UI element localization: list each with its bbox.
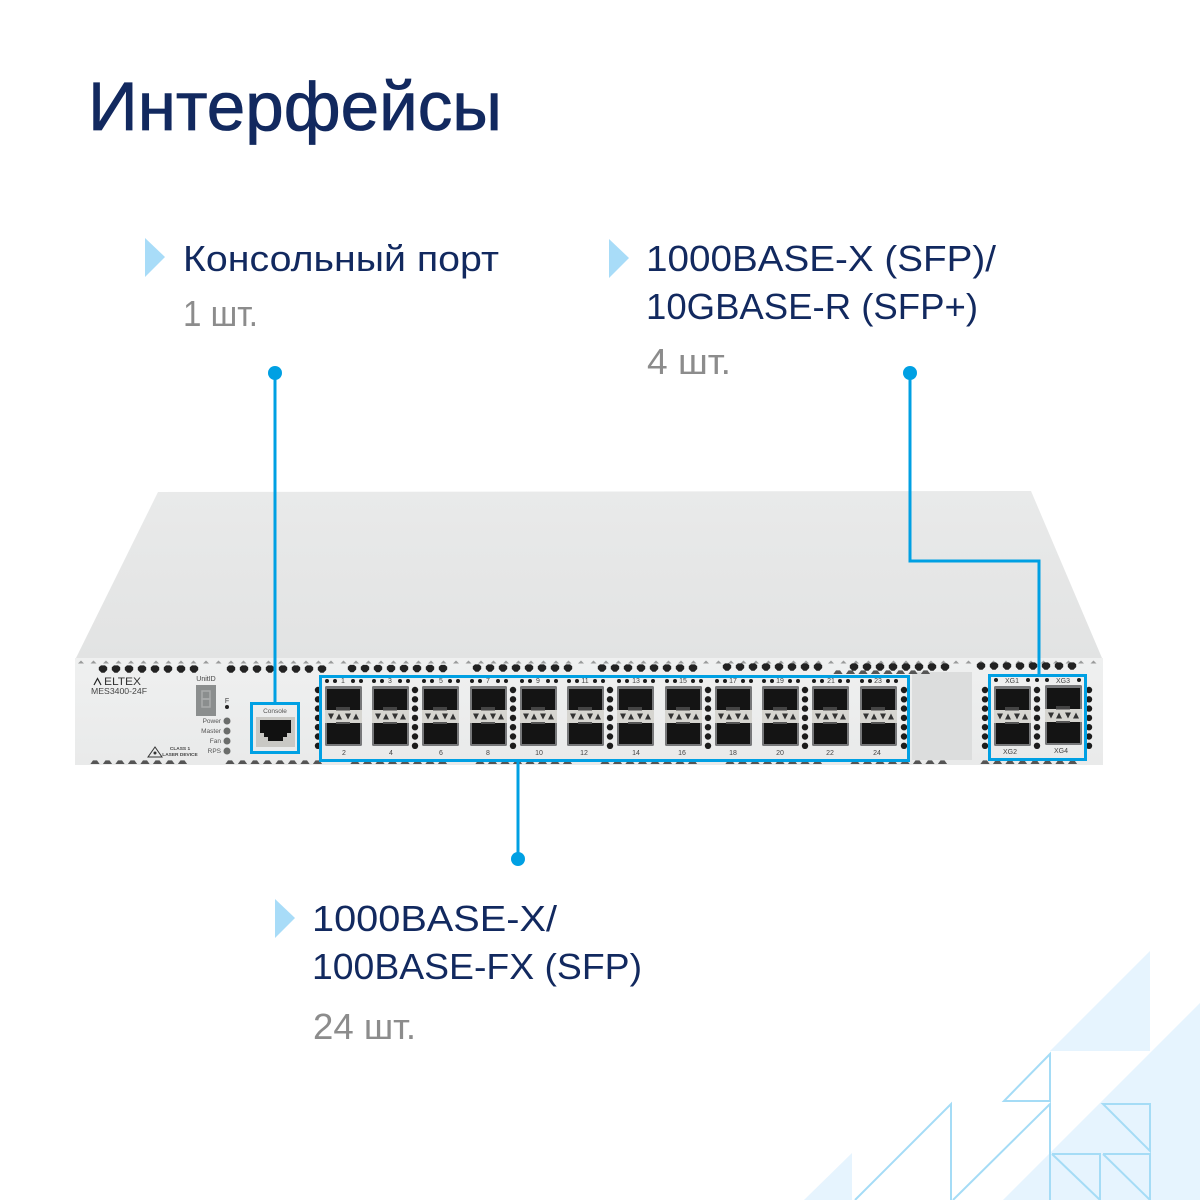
label: SFP+: 1000BASE-X (SFP)/ — [646, 238, 996, 279]
SFP ports 1-24: 6 — [439, 750, 443, 757]
label: SFP: 100BASE-FX (SFP) — [312, 946, 642, 987]
SFP ports 1-24: 19 — [776, 678, 784, 685]
laser warning: LASER DEVICE — [162, 752, 199, 758]
unit id display — [196, 676, 229, 716]
status LEDs: Master — [201, 728, 222, 735]
SFP ports 1-24: 12 — [580, 750, 588, 757]
SFP+ ports XG1-XG4: XG2 — [1003, 749, 1017, 756]
console port: Console — [263, 708, 287, 715]
SFP ports 1-24: 5 — [439, 678, 443, 685]
chassis front panel — [75, 658, 1103, 765]
SFP dot columns — [315, 687, 1092, 749]
SFP ports 1-24: 14 — [632, 750, 640, 757]
SFP ports 1-24: 15 — [679, 678, 687, 685]
SFP ports 1-24: 1 — [341, 678, 345, 685]
brand label: MES3400-24F — [91, 686, 147, 696]
SFP ports 1-24: 24 — [873, 750, 881, 757]
SFP ports 1-24: 9 — [536, 678, 540, 685]
status LEDs — [201, 718, 230, 755]
status LEDs: Power — [203, 718, 222, 725]
SFP+ ports XG1-XG4 — [994, 678, 1082, 756]
label: console port: 1 шт. — [183, 293, 258, 334]
label: SFP+ — [609, 238, 996, 382]
label: SFP+: 4 шт. — [647, 341, 731, 382]
label: SFP: 24 шт. — [313, 1006, 416, 1047]
label: console port — [145, 238, 499, 334]
switch device — [75, 491, 1103, 765]
callout line: SFP+ — [903, 366, 1086, 760]
SFP+ ports XG1-XG4: XG3 — [1056, 678, 1070, 685]
SFP ports 1-24: 16 — [678, 750, 686, 757]
SFP ports 1-24: 4 — [389, 750, 393, 757]
laser warning: CLASS 1 — [170, 746, 190, 752]
brand label — [91, 676, 147, 696]
unit id display: F — [225, 698, 229, 705]
ventilation holes — [90, 662, 1077, 764]
SFP ports 1-24: 2 — [342, 750, 346, 757]
SFP ports 1-24: 11 — [581, 678, 589, 685]
SFP+ ports XG1-XG4: XG4 — [1054, 748, 1068, 755]
SFP ports 1-24: 23 — [874, 678, 882, 685]
SFP ports 1-24: 17 — [729, 678, 737, 685]
SFP ports 1-24: 22 — [826, 750, 834, 757]
chassis top cover — [75, 491, 1102, 660]
label: SFP: 1000BASE-X/ — [312, 898, 557, 939]
background triangles — [804, 951, 1200, 1200]
SFP ports 1-24 — [325, 678, 898, 757]
callout line: SFP — [320, 676, 908, 866]
label: console port: Консольный порт — [183, 238, 499, 279]
label: SFP — [275, 898, 642, 1047]
SFP ports 1-24: 8 — [486, 750, 490, 757]
SFP ports 1-24: 21 — [827, 678, 835, 685]
callout line: console — [252, 366, 298, 752]
SFP ports 1-24: 18 — [729, 750, 737, 757]
unit id display: UnitID — [196, 676, 216, 683]
SFP ports 1-24: 13 — [632, 678, 640, 685]
status LEDs: RPS — [208, 748, 222, 755]
console port — [256, 708, 295, 747]
status LEDs: Fan — [210, 738, 221, 745]
SFP ports 1-24: 3 — [388, 678, 392, 685]
title: Интерфейсы — [88, 68, 502, 145]
brand label: ELTEX — [104, 676, 142, 688]
SFP+ ports XG1-XG4: XG1 — [1005, 678, 1019, 685]
SFP ports 1-24: 10 — [535, 750, 543, 757]
SFP ports 1-24: 20 — [776, 750, 784, 757]
SFP ports 1-24: 7 — [486, 678, 490, 685]
laser warning — [148, 746, 199, 758]
label: SFP+: 10GBASE-R (SFP+) — [646, 286, 978, 327]
